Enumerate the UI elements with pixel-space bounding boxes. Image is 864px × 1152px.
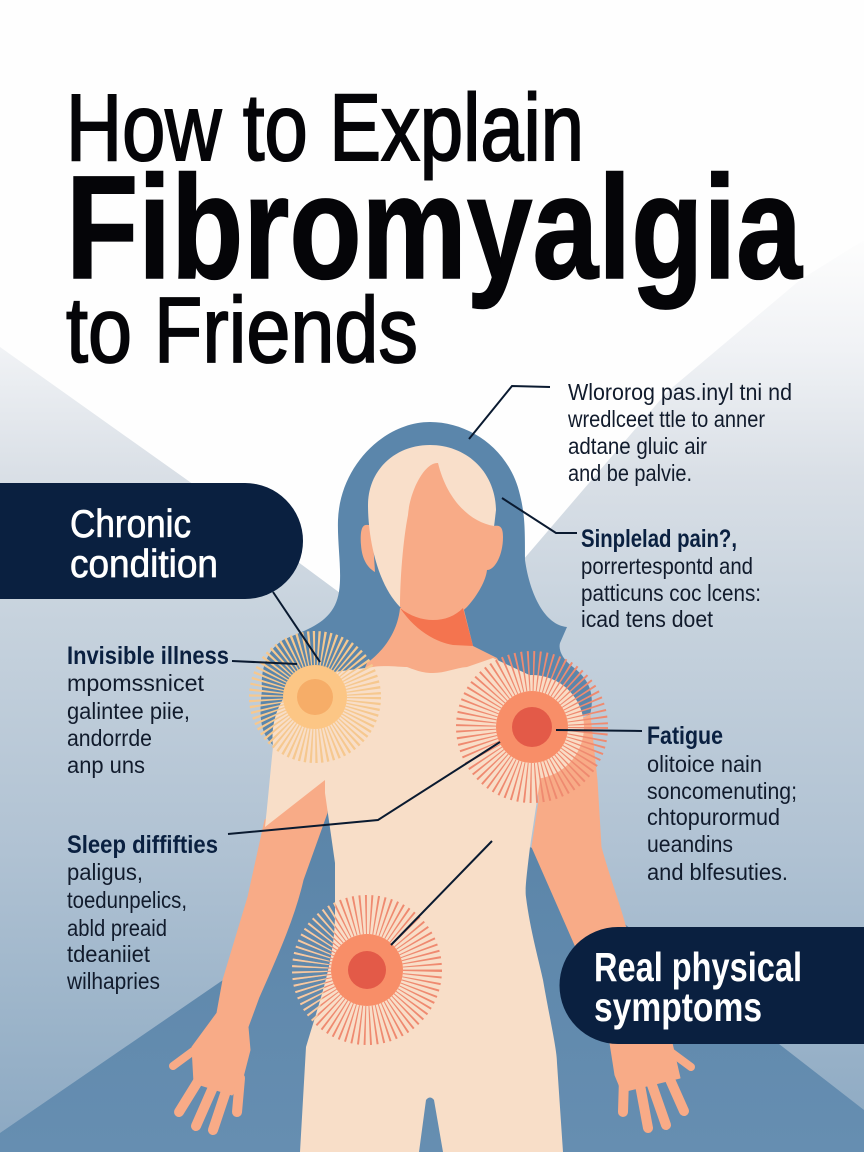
text block: invisible illness bbox=[67, 642, 229, 778]
text block: top right: Wlororog pas.inyl tni nd bbox=[568, 379, 792, 405]
text block: sleep difficulties: toedunpelics, bbox=[67, 887, 187, 913]
text block: top right: and be palvie. bbox=[568, 460, 692, 486]
text block: fatigue: soncomenuting; bbox=[647, 778, 797, 804]
callout: real physical symptoms: Real physical bbox=[594, 944, 802, 990]
neck bbox=[360, 606, 510, 680]
text block: fatigue bbox=[647, 722, 797, 885]
text block: fatigue: chtopurormud bbox=[647, 804, 780, 830]
head bbox=[361, 445, 503, 646]
left ear bbox=[361, 525, 375, 572]
text block: sleep difficulties: tdeaniiet bbox=[67, 941, 151, 967]
head cream bbox=[368, 445, 496, 607]
text block: top right: wredlceet ttle to anner bbox=[567, 406, 765, 432]
hair bbox=[260, 422, 592, 745]
title line 1: How to Explain bbox=[66, 75, 584, 181]
text block: sleep difficulties: wilhapries bbox=[66, 968, 160, 994]
text block: invisible illness: Invisible illness bbox=[67, 642, 229, 670]
right arm and hand bbox=[532, 715, 691, 1128]
text block: fatigue: olitoice nain bbox=[647, 751, 762, 777]
text block: top right: adtane gluic air bbox=[568, 433, 707, 459]
text block: widespread pain: Sinplelad pain?, bbox=[581, 525, 737, 553]
callout: real physical symptoms: symptoms bbox=[594, 984, 762, 1030]
callout: chronic condition: Chronic bbox=[70, 503, 191, 546]
text block: fatigue: Fatigue bbox=[647, 722, 723, 750]
neck band bbox=[400, 608, 473, 646]
torso bbox=[265, 658, 563, 1152]
title line 3: to Friends bbox=[66, 278, 418, 382]
text block: sleep difficulties bbox=[66, 831, 218, 994]
text block: widespread pain: patticuns coc lcens: bbox=[581, 580, 761, 606]
text block: top right bbox=[567, 379, 792, 486]
text block: invisible illness: mpomssnicet bbox=[67, 670, 205, 696]
text block: invisible illness: galintee piie, bbox=[67, 698, 190, 724]
text block: invisible illness: andorrde bbox=[67, 725, 152, 751]
left arm and hand bbox=[173, 770, 327, 1130]
text block: sleep difficulties: paligus, bbox=[67, 859, 143, 885]
face bbox=[400, 463, 503, 620]
text block: widespread pain bbox=[581, 525, 761, 632]
text block: sleep difficulties: abld preaid bbox=[67, 915, 167, 941]
text block: fatigue: ueandins bbox=[647, 831, 733, 857]
title bbox=[66, 75, 803, 382]
text block: widespread pain: icad tens doet bbox=[581, 606, 714, 632]
text block: invisible illness: anp uns bbox=[67, 752, 145, 778]
figure: woman silhouette bbox=[173, 422, 691, 1152]
callout: chronic condition: condition bbox=[70, 543, 218, 586]
text block: widespread pain: porrertespontd and bbox=[581, 553, 753, 579]
callout: chronic condition bbox=[0, 483, 303, 599]
pain burst: abdomen bbox=[312, 914, 422, 1026]
pain burst: left shoulder bbox=[266, 648, 364, 746]
leader lines bbox=[228, 386, 642, 945]
pain burst: right shoulder bbox=[476, 671, 588, 783]
text block: fatigue: and blfesuties. bbox=[647, 859, 788, 885]
callout: real physical symptoms bbox=[560, 927, 864, 1044]
shoulder highlight bbox=[480, 675, 584, 779]
text block: sleep difficulties: Sleep diffifties bbox=[67, 831, 218, 859]
